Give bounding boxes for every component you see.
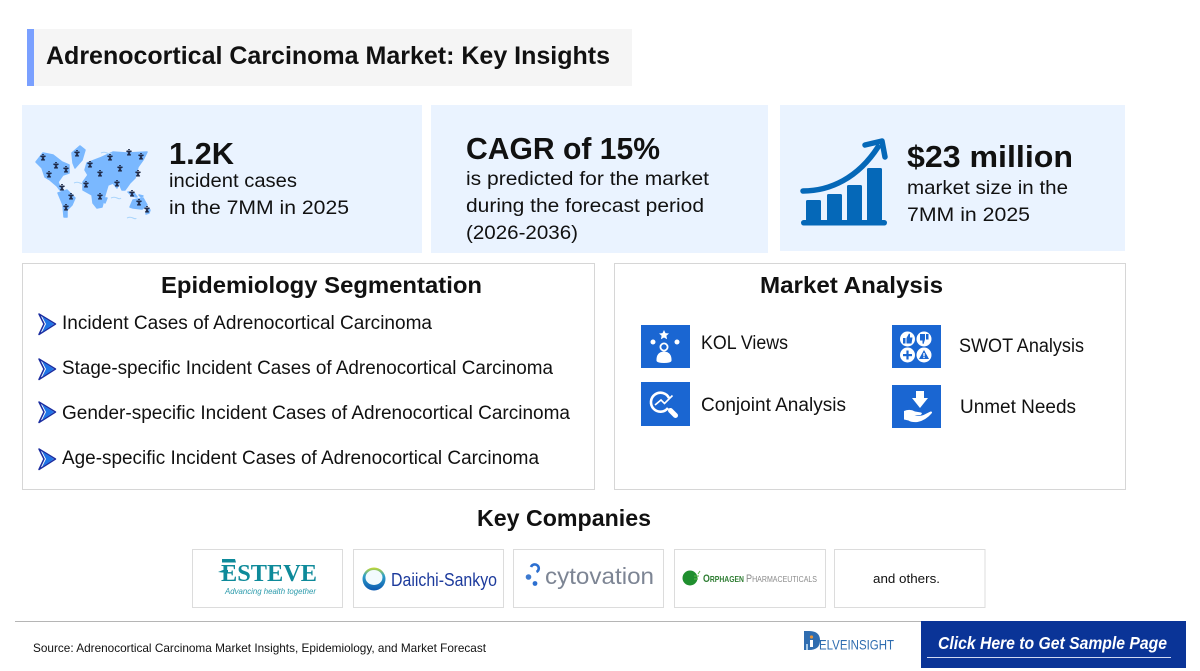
logo: DelveInsight bbox=[804, 631, 894, 652]
button: sample page bbox=[921, 621, 1186, 668]
button: sample page: Click Here to Get Sample Page bbox=[938, 633, 1167, 653]
logo: Daiichi-Sankyo bbox=[354, 550, 504, 608]
stat: CAGR of 15%: is predicted for the market bbox=[466, 168, 710, 190]
logo: Orphagen Pharmaceuticals: PHARMACEUTICALS bbox=[746, 573, 817, 585]
item: SWOT analysis: SWOT Analysis bbox=[959, 336, 1084, 357]
item: unmet needs bbox=[892, 385, 1076, 428]
item: unmet needs: Unmet Needs bbox=[960, 397, 1076, 418]
stat: CAGR of 15%: during the forecast period bbox=[466, 195, 704, 217]
others box bbox=[834, 550, 985, 608]
logo: Daiichi-Sankyo: Daiichi-Sankyo bbox=[391, 570, 497, 590]
item: SWOT analysis bbox=[892, 325, 1084, 368]
list item: stage-specific: Stage-specific Incident Cases of Adrenocortical Carcinoma bbox=[62, 358, 553, 379]
item: conjoint analysis bbox=[641, 382, 846, 426]
title: Adrenocortical Carcinoma Market: Key Insights bbox=[46, 42, 610, 70]
stat: $23 million: 7MM in 2025 bbox=[907, 204, 1030, 226]
logo: Esteve: Advancing health together bbox=[224, 586, 317, 596]
logo: Orphagen Pharmaceuticals: ORPHAGEN bbox=[703, 573, 744, 585]
panel: market size bbox=[780, 105, 1125, 251]
stat: CAGR of 15% bbox=[466, 131, 710, 244]
logo: Orphagen Pharmaceuticals bbox=[674, 550, 826, 608]
logo: Esteve bbox=[192, 550, 342, 608]
list item: gender-specific: Gender-specific Incident Cases of Adrenocortical Carcinoma bbox=[62, 403, 570, 424]
panel: market analysis bbox=[614, 264, 1126, 490]
logo: cytovation: cytovation bbox=[545, 563, 654, 589]
stat: 1.2K incident cases bbox=[169, 136, 349, 219]
logo: Esteve: ESTEVE bbox=[221, 561, 317, 587]
stat: 1.2K incident cases: incident cases bbox=[169, 170, 297, 192]
icon: world map with patient markers bbox=[36, 146, 150, 219]
stat: $23 million: market size in the bbox=[907, 177, 1068, 199]
stat: 1.2K incident cases: in the 7MM in 2025 bbox=[169, 197, 349, 219]
panel: incident cases bbox=[22, 105, 422, 253]
stat: CAGR of 15%: CAGR of 15% bbox=[466, 131, 660, 166]
stat: 1.2K incident cases: 1.2K bbox=[169, 136, 235, 171]
stat: $23 million bbox=[907, 139, 1073, 226]
item: KOL views: KOL Views bbox=[701, 333, 788, 354]
panel: epidemiology segmentation bbox=[22, 264, 594, 490]
stat: $23 million: $23 million bbox=[907, 139, 1073, 174]
icon: rising bar chart with arrow bbox=[801, 141, 887, 226]
list item: age-specific: Age-specific Incident Cases of Adrenocortical Carcinoma bbox=[62, 448, 539, 469]
heading: key companies: Key Companies bbox=[477, 505, 651, 531]
list item: incident cases: Incident Cases of Adrenocortical Carcinoma bbox=[62, 313, 432, 334]
heading: epidemiology segmentation: Epidemiology Segmentation bbox=[161, 272, 482, 298]
footer divider bbox=[15, 621, 1186, 622]
others box: and others. bbox=[873, 571, 940, 586]
title bbox=[27, 29, 632, 86]
heading: market analysis: Market Analysis bbox=[760, 272, 943, 298]
item: conjoint analysis: Conjoint Analysis bbox=[701, 395, 846, 416]
stat: CAGR of 15%: (2026-2036) bbox=[466, 222, 578, 244]
logo: cytovation bbox=[514, 550, 664, 608]
source note: Source: Adrenocortical Carcinoma Market Insights, Epidemiology, and Market Forecast bbox=[33, 641, 487, 655]
panel: CAGR bbox=[431, 105, 768, 253]
item: KOL views bbox=[641, 325, 788, 368]
logo: DelveInsight: ELVEINSIGHT bbox=[819, 638, 894, 652]
